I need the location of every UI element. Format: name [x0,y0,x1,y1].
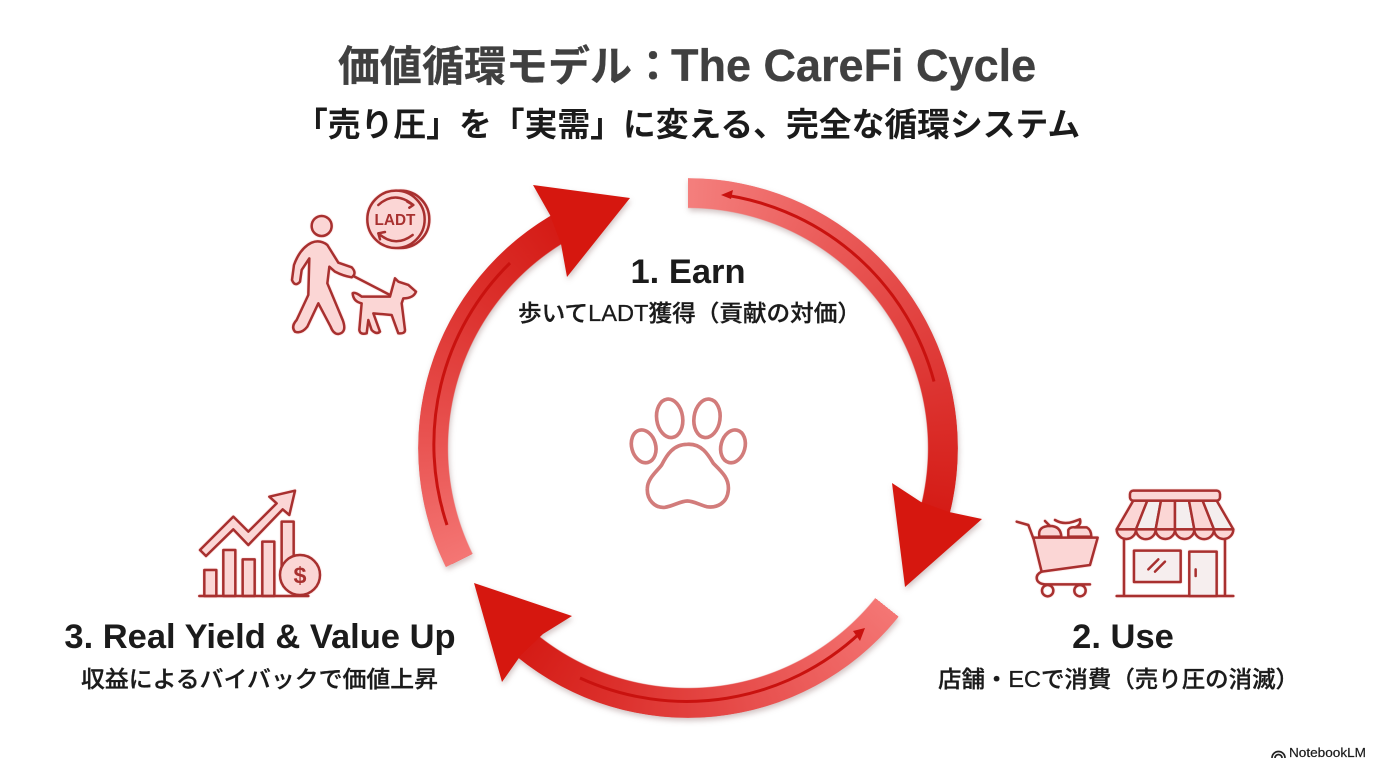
arrow 3: Real Yield to Earn [416,185,632,572]
step 2 heading: 2. Use [1072,618,1174,656]
step 1 description: 歩いてLADT獲得（貢献の対価） [518,300,861,326]
step 3 heading: 3. Real Yield & Value Up [64,618,456,656]
icon: walker with dog and LADT coin: LADT [375,212,416,229]
title: The CareFi Cycle [671,40,1036,91]
icon: growth chart with coin: $ [293,562,306,588]
icon: growth chart with coin [199,491,320,596]
title: 価値循環モデル： [338,43,674,90]
NotebookLM logo: NotebookLM [1289,745,1366,760]
step 2 description: 店舗・ECで消費（売り圧の消滅） [938,666,1299,692]
icon: paw [628,397,749,507]
icon: walker with dog and LADT coin [292,191,429,334]
icon: shopping cart [1017,519,1098,596]
icon: store [1117,491,1233,596]
step 1 heading: 1. Earn [630,253,746,291]
subtitle: 「売り圧」を「実需」に変える、完全な循環システム [295,106,1080,143]
step 3 description: 収益によるバイバックで価値上昇 [81,666,438,692]
arrow 1: Earn to Use [686,178,983,590]
arrow 2: Use to Real Yield [474,583,901,724]
